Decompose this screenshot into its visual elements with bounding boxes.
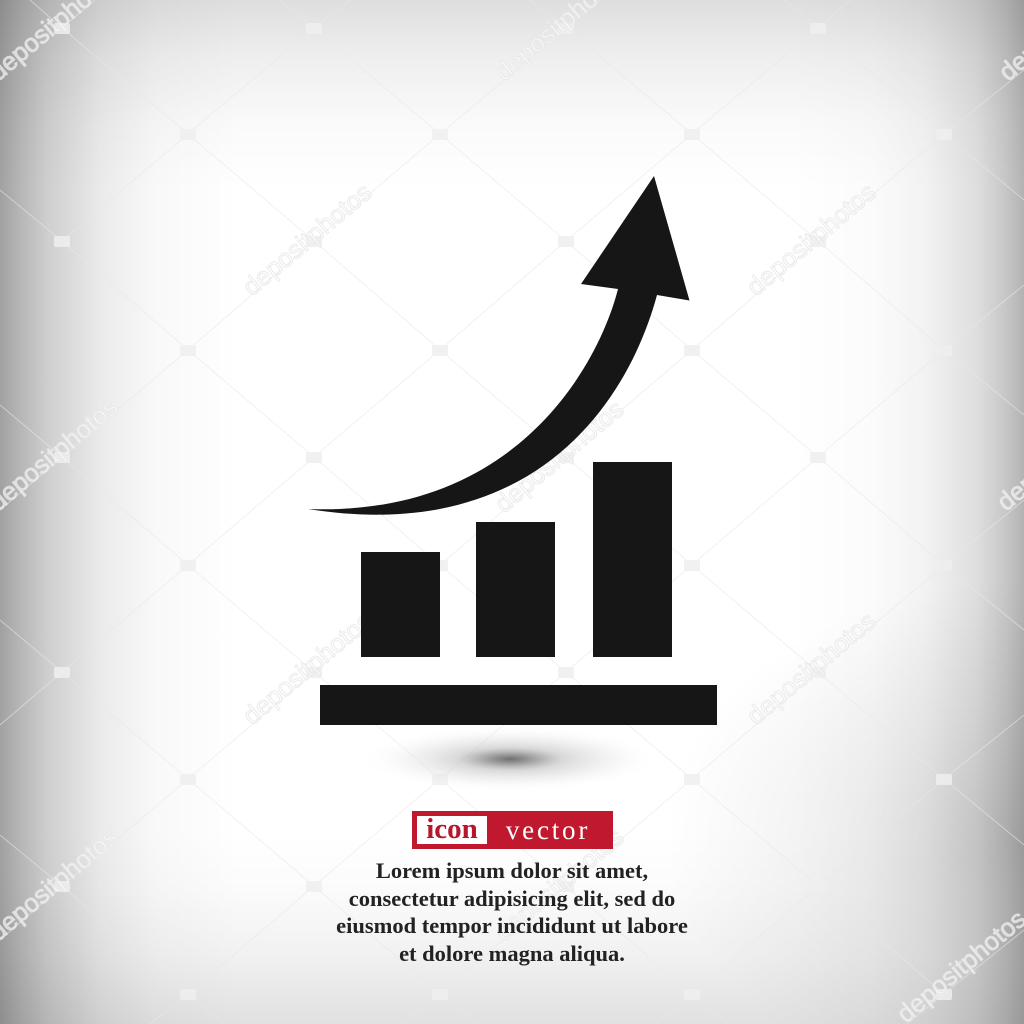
bar 3 xyxy=(593,462,672,657)
drop shadow xyxy=(360,726,660,792)
text block: lorem ipsum xyxy=(336,858,688,966)
watermark pattern: depositphotos xyxy=(238,178,378,302)
bar 2 xyxy=(476,522,555,657)
bar 1 xyxy=(361,552,440,657)
text block: lorem ipsum: eiusmod tempor incididunt ut labore xyxy=(336,913,688,938)
text block: lorem ipsum: et dolore magna aliqua. xyxy=(399,941,625,966)
watermark pattern: depositphotos xyxy=(490,395,630,519)
watermark pattern: depositphotos xyxy=(490,823,630,947)
text block: lorem ipsum: Lorem ipsum dolor sit amet, xyxy=(376,858,648,883)
text block: lorem ipsum: consectetur adipisicing elit, sed do xyxy=(349,886,675,911)
badge: icon vector: vector xyxy=(506,815,590,845)
badge: icon vector xyxy=(412,811,613,849)
base line xyxy=(320,685,717,725)
watermark pattern: depositphotos xyxy=(742,607,882,731)
watermark pattern: depositphotos xyxy=(742,178,882,302)
badge: icon vector: icon xyxy=(426,813,478,845)
watermark pattern: depositphotos xyxy=(238,607,378,731)
icon: growth chart xyxy=(308,176,717,725)
arrow: rising curve xyxy=(308,176,690,515)
